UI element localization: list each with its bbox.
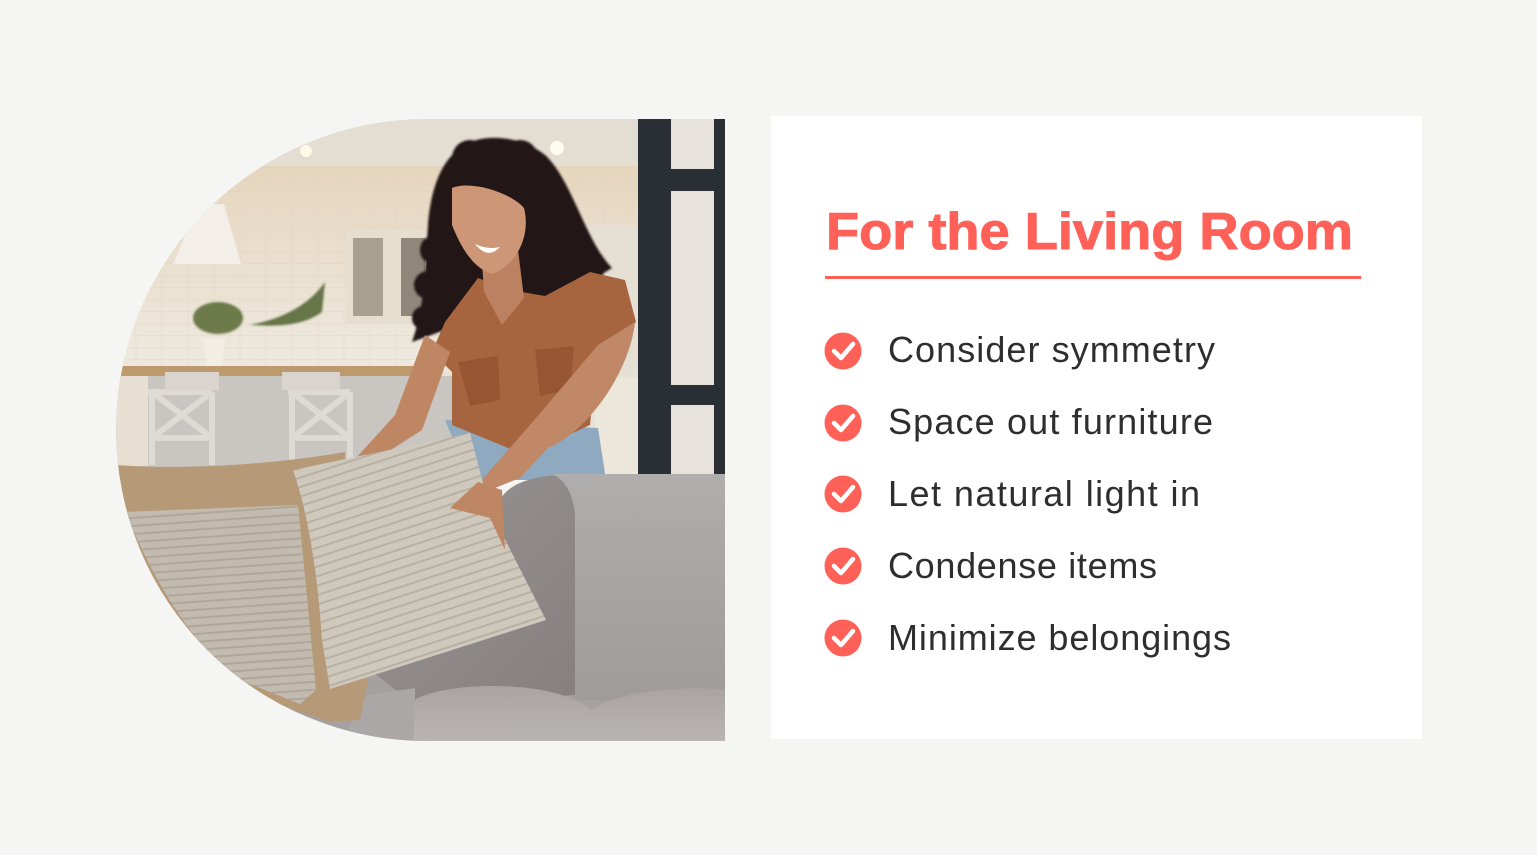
right cabinets bbox=[586, 225, 638, 371]
list item: Consider symmetry: Consider symmetry bbox=[888, 329, 1215, 370]
sofa body bbox=[198, 474, 725, 741]
shirt pockets bbox=[458, 346, 574, 406]
woman bbox=[356, 138, 636, 490]
curly hair bbox=[412, 138, 612, 342]
kitchen wall and ceiling bbox=[122, 119, 638, 428]
title: For the Living Room bbox=[826, 203, 1353, 261]
ceiling lights bbox=[300, 141, 564, 157]
list item: Space out furniture: Space out furniture bbox=[888, 401, 1213, 442]
face bbox=[452, 185, 526, 274]
photo: woman arranging pillows on a sofa bbox=[116, 119, 725, 741]
front pillow bbox=[293, 433, 546, 689]
plants bbox=[193, 282, 325, 369]
bar stools bbox=[148, 372, 350, 465]
range hood bbox=[173, 204, 241, 264]
kitchen counter bbox=[116, 366, 456, 476]
text card bbox=[771, 116, 1422, 739]
jeans bbox=[445, 420, 606, 480]
neck bbox=[482, 250, 524, 325]
list item: Condense items: Condense items bbox=[888, 545, 1157, 586]
left arm bbox=[356, 335, 450, 462]
smile bbox=[475, 244, 500, 253]
dark window frame bbox=[638, 119, 725, 475]
kitchen cabinet bbox=[346, 230, 430, 324]
title underline bbox=[825, 276, 1361, 279]
shirt bbox=[432, 272, 636, 455]
list item: Minimize belongings: Minimize belongings bbox=[888, 617, 1231, 658]
list item: Let natural light in: Let natural light in bbox=[888, 473, 1200, 514]
infographic canvas bbox=[116, 116, 1422, 741]
left pillow bbox=[125, 505, 316, 704]
blanket bbox=[116, 452, 368, 722]
right arm bbox=[480, 322, 635, 490]
hand on pillow bbox=[450, 482, 505, 550]
